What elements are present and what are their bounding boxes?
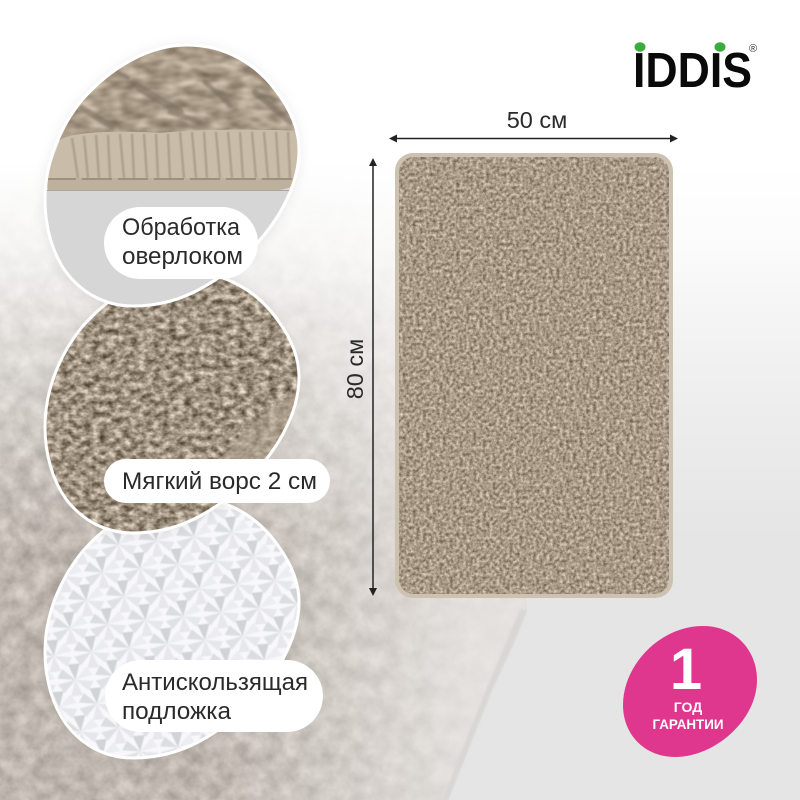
badge: warranty: 1 xyxy=(670,637,702,702)
product: bath mat xyxy=(395,153,673,598)
label: anti-slip xyxy=(105,660,323,732)
top pile xyxy=(60,46,295,140)
label: 80 cm: 80 см xyxy=(342,339,368,399)
arrow: height dimension xyxy=(369,158,377,596)
label: 50 cm: 50 см xyxy=(507,107,567,133)
background xyxy=(0,213,800,800)
arrow: width dimension xyxy=(389,134,678,142)
label: soft pile xyxy=(104,459,330,503)
badge: warranty xyxy=(623,626,757,757)
badge: warranty: ГАРАНТИИ xyxy=(652,716,724,732)
label: anti-slip: Антискользящая xyxy=(122,669,308,696)
blob: soft pile xyxy=(44,278,300,536)
background rug photo xyxy=(0,223,527,800)
label: overlock xyxy=(104,207,258,279)
blob: anti-slip backing xyxy=(44,503,300,760)
label: overlock: Обработка xyxy=(122,214,241,241)
blob: overlock edge xyxy=(43,46,300,308)
logo: IDDIS: ® xyxy=(749,43,757,55)
label: anti-slip: подложка xyxy=(122,698,232,725)
badge: warranty: ГОД xyxy=(674,699,702,715)
label: overlock: оверлоком xyxy=(122,243,243,270)
label: soft pile: Мягкий ворс 2 см xyxy=(122,468,317,495)
overlock band xyxy=(45,130,300,190)
logo: IDDIS: IDDIS xyxy=(633,44,752,98)
